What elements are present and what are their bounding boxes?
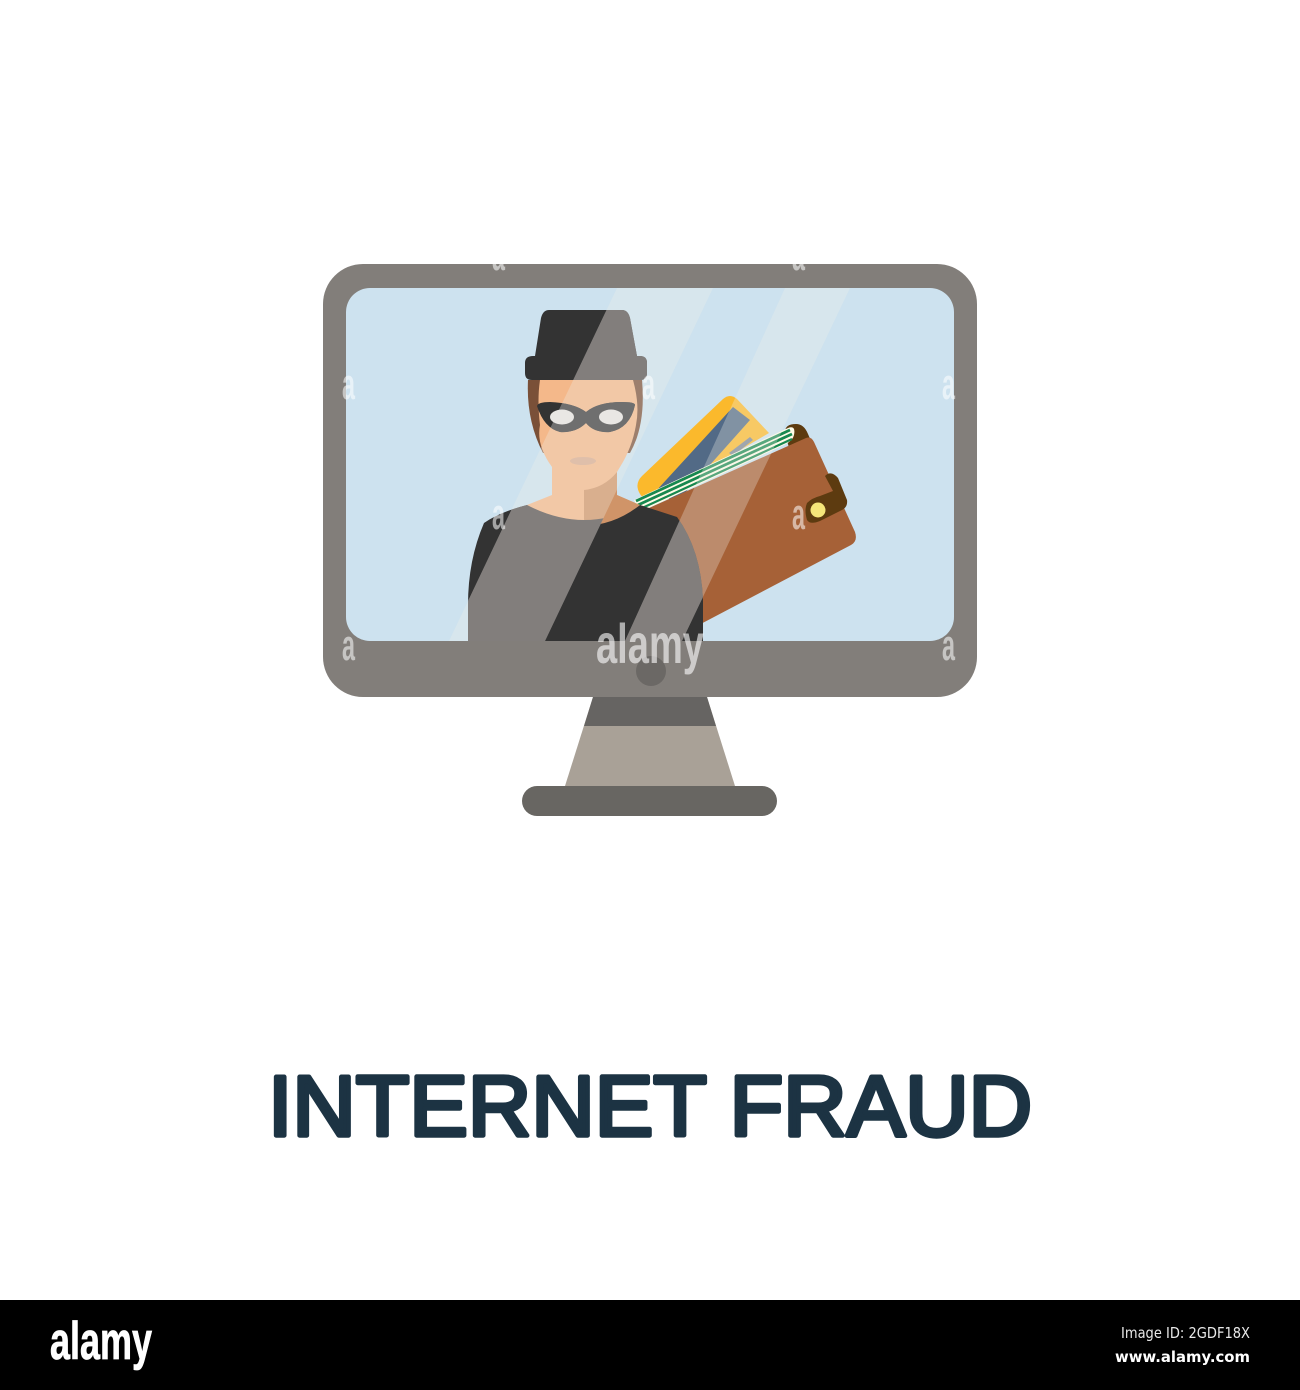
watermark: small marks: a <box>492 231 505 280</box>
lips <box>570 457 596 465</box>
icon: wallet with cards <box>634 396 856 640</box>
watermark: small marks: a <box>642 360 655 409</box>
watermark: small marks <box>342 231 955 670</box>
watermark: small marks: a <box>792 490 805 539</box>
footer logo: alamy <box>50 1312 152 1371</box>
body <box>468 505 703 645</box>
watermark: small marks: a <box>792 231 805 280</box>
watermark: small marks: a <box>492 490 505 539</box>
monitor frame <box>323 264 977 697</box>
title: INTERNET FRAUD <box>268 1060 1032 1155</box>
monitor illustration <box>323 264 977 816</box>
hat <box>525 310 647 380</box>
glass reflection <box>449 288 850 641</box>
watermark: small marks: a <box>342 360 355 409</box>
screen with thief and wallet <box>346 288 954 645</box>
figure: masked thief <box>468 310 703 645</box>
image id: Image ID: 2GDF18X <box>1121 1324 1250 1342</box>
watermark: small marks: a <box>942 621 955 670</box>
neck and face <box>527 380 640 522</box>
website: www.alamy.com <box>1115 1348 1250 1366</box>
power button <box>636 656 666 686</box>
hair <box>528 380 643 453</box>
watermark: alamy: alamy <box>596 612 704 675</box>
footer bar <box>0 1300 1300 1390</box>
mask eye holes <box>550 410 623 424</box>
mask <box>537 402 635 432</box>
monitor stand <box>522 697 777 816</box>
reflected dark garments <box>468 310 703 645</box>
watermark: small marks: a <box>942 360 955 409</box>
watermark: small marks: a <box>342 621 355 670</box>
